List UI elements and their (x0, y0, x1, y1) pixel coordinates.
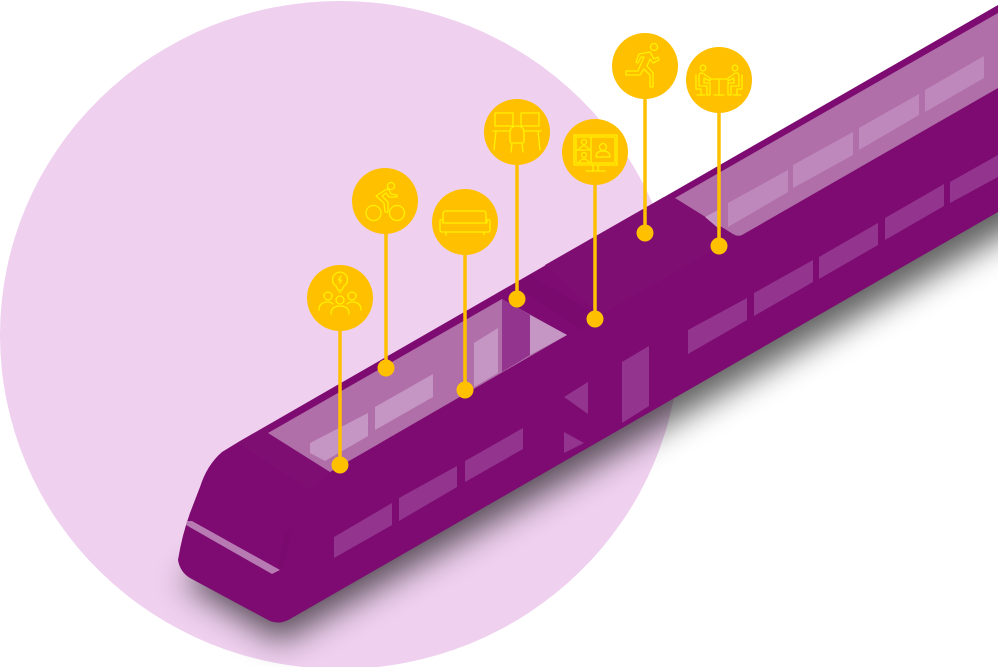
side windows (334, 155, 998, 558)
rear roof opening (675, 13, 998, 236)
icon: desk with monitors and chair (493, 113, 541, 152)
train (178, 5, 998, 623)
icon: runner (626, 44, 659, 87)
icon: team with light bulb (319, 272, 361, 314)
icon: sofa (440, 211, 490, 235)
icon: two people at table (696, 65, 742, 95)
icon: cyclist (366, 182, 404, 220)
pin: running (612, 33, 678, 242)
front roof opening (268, 299, 567, 472)
pin: sofa (432, 189, 498, 398)
pin: team idea (307, 265, 373, 474)
headlight strip (186, 521, 280, 574)
pin: video call (562, 119, 628, 328)
train body (178, 5, 998, 623)
pin: desk (484, 99, 550, 308)
front roof panel (237, 424, 330, 490)
middle roof panel (545, 197, 738, 315)
pin: meeting at table (686, 47, 752, 254)
front crease (277, 528, 293, 570)
train shadow (170, 212, 998, 660)
icon: video conference monitor (574, 135, 617, 171)
pin: cycling (352, 168, 418, 376)
roof joint band (512, 275, 597, 330)
background circle (0, 1, 680, 667)
